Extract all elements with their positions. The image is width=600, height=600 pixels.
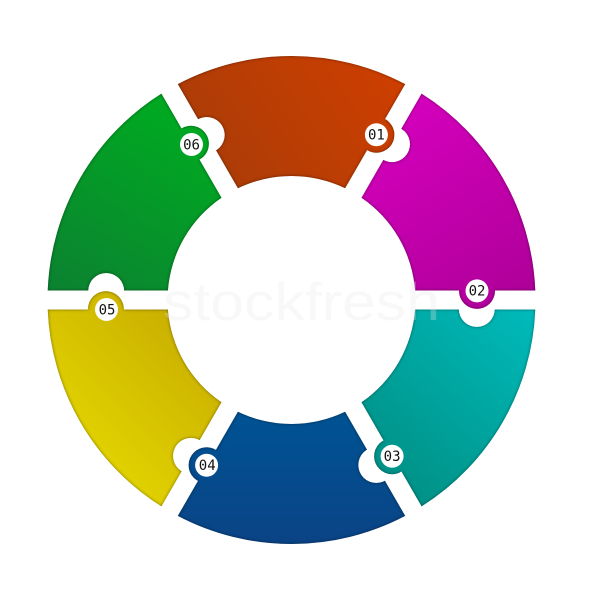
segment 01: orange <box>178 56 405 188</box>
badge 03 <box>381 445 404 468</box>
badge 05: 05 <box>99 303 115 319</box>
badge 04 <box>195 454 218 477</box>
badge 03: 03 <box>384 449 401 465</box>
badge 01: 01 <box>368 128 385 144</box>
watermark text: stockfresh <box>163 273 440 332</box>
segment 03: teal <box>362 310 535 506</box>
segment 06: green <box>48 94 222 290</box>
badge 02 <box>466 279 488 302</box>
segment 05: yellow <box>48 291 222 506</box>
badge 05 <box>95 298 118 321</box>
badge 06 <box>180 133 203 156</box>
infographic: six-part puzzle ring <box>48 56 536 544</box>
badge 02: 02 <box>469 284 485 300</box>
badge 04: 04 <box>199 458 216 474</box>
badge 06: 06 <box>183 138 200 154</box>
segment 04: blue <box>178 412 405 544</box>
segment 02: magenta <box>362 94 535 309</box>
badge 01 <box>365 123 388 146</box>
